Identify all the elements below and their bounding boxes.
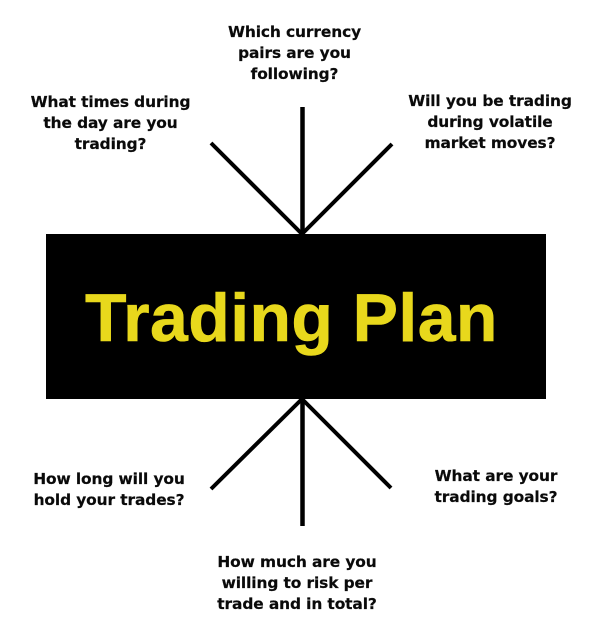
question: volatile moves: during volatile [427, 113, 553, 131]
question: times of day: the day are you [43, 114, 178, 132]
question: volatile moves [408, 92, 572, 152]
question: risk: trade and in total? [217, 595, 377, 613]
question: volatile moves: Will you be trading [408, 92, 572, 110]
question: currency pairs [228, 23, 361, 83]
question: risk [217, 553, 377, 613]
question: risk: How much are you [217, 553, 377, 571]
question: currency pairs: pairs are you [238, 44, 351, 62]
question: volatile moves: market moves? [425, 134, 555, 152]
question: trading goals: What are your [435, 467, 557, 485]
question: risk: willing to risk per [222, 574, 372, 592]
question: holding time: How long will you [33, 470, 185, 488]
central box: Trading Plan [46, 234, 546, 399]
question: currency pairs: Which currency [228, 23, 361, 41]
question: holding time: hold your trades? [34, 491, 184, 509]
question: times of day: trading? [75, 135, 146, 153]
title: Trading Plan [85, 280, 498, 356]
question: times of day: What times during [31, 93, 190, 111]
question: trading goals [434, 467, 558, 506]
question: times of day [31, 93, 190, 153]
question: currency pairs: following? [251, 65, 338, 83]
question: trading goals: trading goals? [435, 488, 557, 506]
question: holding time [33, 470, 185, 509]
